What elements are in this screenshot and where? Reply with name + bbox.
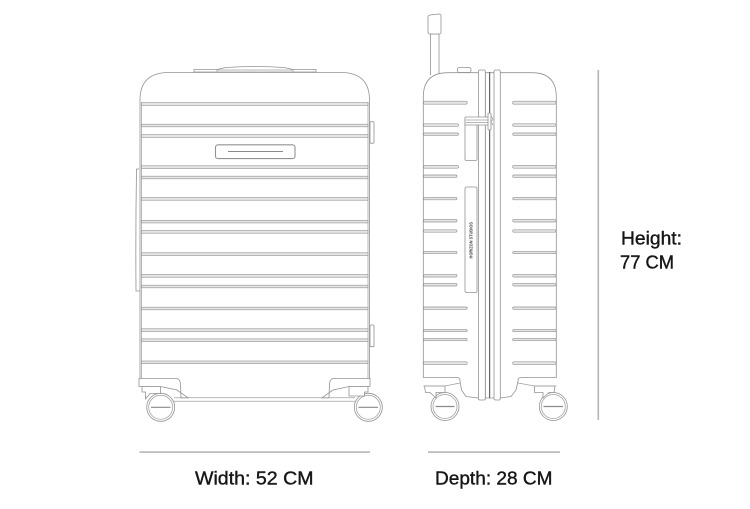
side body xyxy=(423,73,556,398)
mount step lines xyxy=(423,383,556,386)
width dimension line xyxy=(140,451,370,453)
front ribs xyxy=(142,103,368,364)
brand text: HORIZON STUDIOS xyxy=(469,222,474,258)
width label: Width: 52 CM xyxy=(195,468,314,488)
luggage tag pocket xyxy=(465,113,493,160)
front view suitcase xyxy=(136,66,382,421)
suitcase body xyxy=(140,72,370,378)
brand label xyxy=(465,187,477,292)
front grab plate xyxy=(216,145,295,159)
caster mounts xyxy=(139,378,370,399)
wheels xyxy=(431,392,567,420)
height label: 77 CM xyxy=(620,252,674,272)
wheels xyxy=(147,393,382,421)
depth dimension line xyxy=(428,451,560,453)
side ribs xyxy=(424,101,556,364)
side view suitcase xyxy=(423,14,567,420)
side latches xyxy=(370,122,374,347)
telescopic handle xyxy=(428,14,441,75)
top button xyxy=(458,68,471,72)
height label: Height: xyxy=(621,228,682,248)
side handle xyxy=(136,169,140,291)
height label xyxy=(620,228,682,272)
caster mounts xyxy=(424,386,555,398)
base rails xyxy=(173,398,356,401)
top carry handle xyxy=(194,66,316,72)
depth label: Depth: 28 CM xyxy=(435,468,552,488)
zipper columns xyxy=(478,70,500,400)
height dimension line xyxy=(598,70,599,420)
